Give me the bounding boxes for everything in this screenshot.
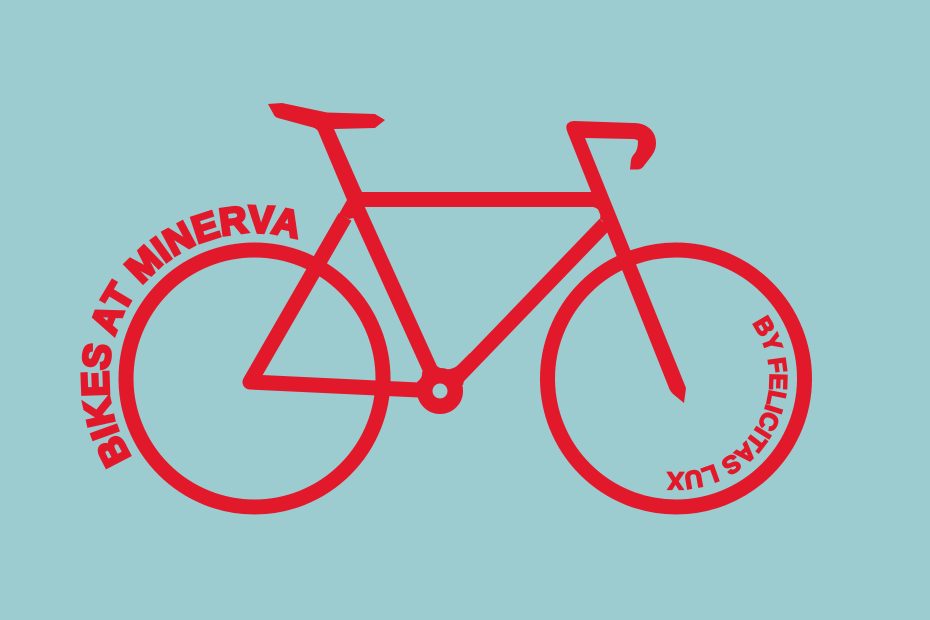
- curved byline: By Felicitas Lux: BY FELICITAS LUX: [666, 314, 788, 490]
- left wheel: [126, 250, 383, 507]
- fork and handlebar: [566, 121, 686, 403]
- bicycle frame: [250, 188, 612, 391]
- saddle and seat post: [268, 103, 385, 200]
- right wheel: [548, 250, 804, 507]
- curved title: Bikes at Minerva: BIKES AT MINERVA: [80, 204, 298, 470]
- bottom bracket: [425, 376, 455, 406]
